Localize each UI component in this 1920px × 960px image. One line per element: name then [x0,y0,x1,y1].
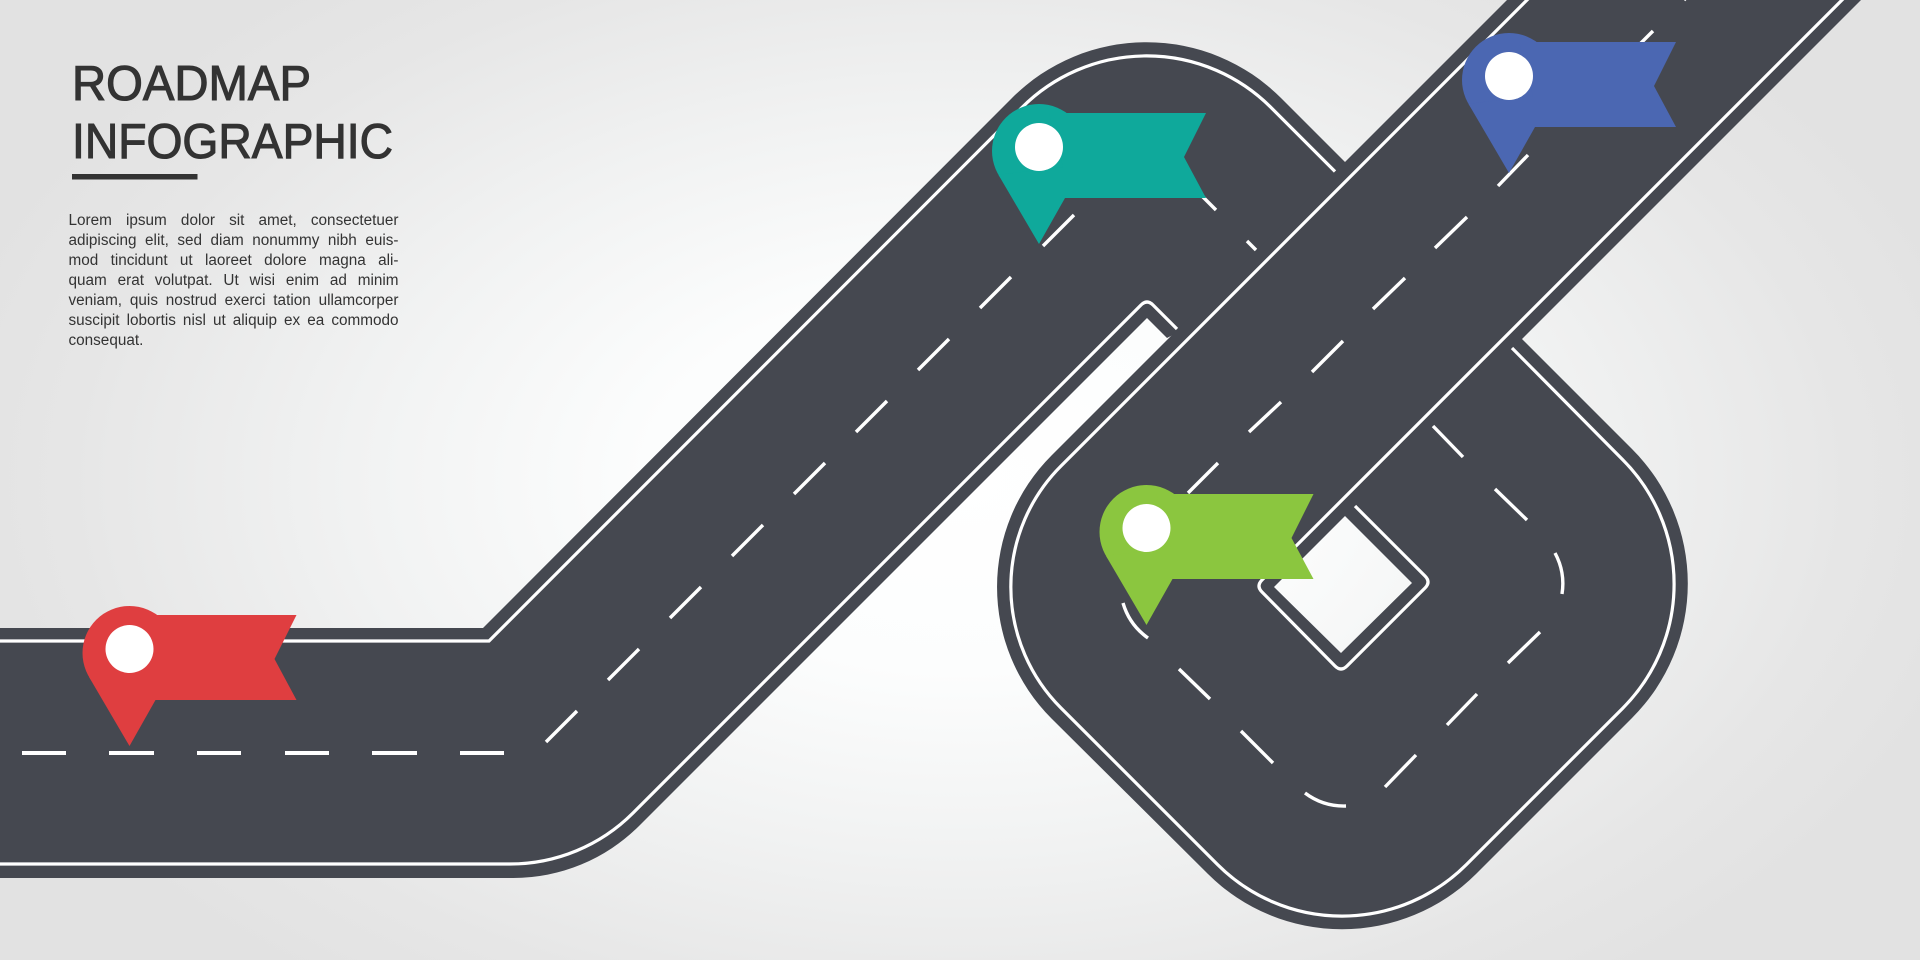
body paragraph: Lorem ipsum dolor sit amet, consectetuer [68,212,398,229]
body paragraph: quam erat volutpat. Ut wisi enim ad minim [68,272,398,289]
body paragraph: consequat. [68,332,143,349]
body paragraph: suscipit lobortis nisl ut aliquip ex ea commodo [68,312,398,329]
road: lower-left section and upper bend [0,42,1400,878]
title: INFOGRAPHIC [72,115,393,169]
pin: blue [1462,33,1676,173]
road: loop and upper-right section with diamond island [997,0,1914,929]
title [72,57,393,169]
road centre dashes [22,0,1715,806]
body paragraph: adipiscing elit, sed diam nonummy nibh euis- [68,232,398,249]
body paragraph: mod tincidunt ut laoreet dolore magna ali- [68,252,398,269]
body paragraph: veniam, quis nostrud exerci tation ullamcorper [68,292,398,309]
body paragraph [68,212,398,349]
title underline [72,174,198,180]
pin: red [82,606,296,746]
pin: teal [992,104,1206,244]
pin: green [1100,485,1314,625]
title: ROADMAP [72,57,311,111]
